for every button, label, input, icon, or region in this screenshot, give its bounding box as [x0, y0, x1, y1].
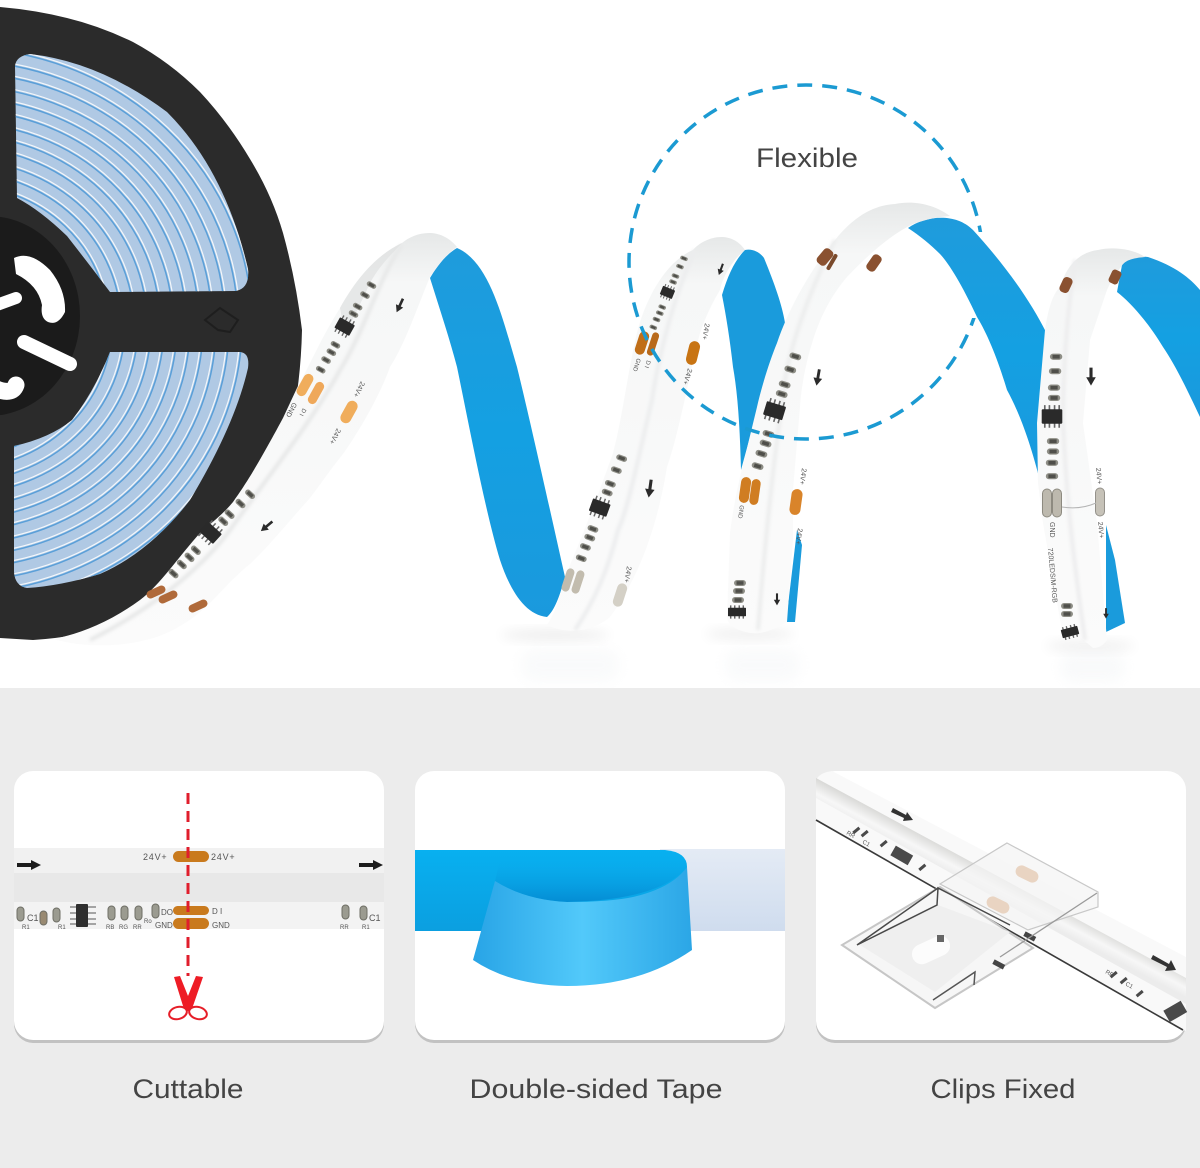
strip: C1 [1124, 982, 1134, 991]
strip silk-screen labels: 24V+ [351, 380, 365, 398]
label: double-sided tape: Double-sided Tape [470, 1074, 722, 1104]
light strip [660, 849, 785, 931]
hub left slot [0, 298, 16, 306]
strip: RR [845, 831, 856, 840]
strip: C1 [861, 840, 871, 849]
strip silk-screen labels: 24V+ [681, 367, 693, 385]
hub slots [14, 256, 65, 323]
reel outer disc [0, 7, 302, 640]
strip photo with circuit detail: RG [119, 925, 128, 931]
hub bar slot [24, 342, 70, 364]
strip photo with circuit detail: C1 [27, 913, 39, 923]
blue tape section 4 [1117, 257, 1200, 417]
strip silk-screen labels: 720LEDS/M-RGB [1046, 548, 1058, 604]
strip photo with circuit detail: Ro [144, 919, 152, 925]
red cut line [186, 793, 190, 976]
flexible callout circle [629, 85, 983, 439]
strip silk-screen labels: D I [643, 359, 651, 369]
strip silk-screen labels: 24V+ [622, 566, 632, 583]
strip photo with circuit detail: 24V+ [211, 852, 235, 862]
strip [816, 771, 1187, 1031]
strip photo with circuit detail: RB [106, 925, 114, 931]
blue tape section 1 [430, 248, 565, 617]
floor shadows and reflections under the strip [500, 629, 1135, 682]
strip photo with circuit detail: RR [340, 925, 349, 931]
strip section 4 [1037, 248, 1145, 648]
strip photo with circuit detail: RR [133, 925, 142, 931]
strip photo with circuit detail: R1 [22, 925, 30, 931]
reel recycling mark [205, 308, 238, 332]
strip leading out of the reel [53, 233, 457, 645]
blue tape section 2 [722, 250, 785, 470]
strip silk-screen labels: GND [284, 401, 297, 418]
strip silk-screen labels: GND [1048, 522, 1055, 538]
panel: double-sided tape [415, 771, 785, 1043]
strip silk-screen labels: 24V+ [1096, 522, 1104, 539]
strip photo with circuit detail: GND [155, 921, 173, 930]
strip photo with circuit detail: R1 [362, 925, 370, 931]
label: clips fixed: Clips Fixed [930, 1074, 1076, 1104]
strip silk-screen labels [284, 323, 1104, 604]
strip section 3 [727, 203, 950, 633]
strip silk-screen labels: 24V+ [794, 528, 803, 545]
strip section 2 [547, 237, 745, 631]
strip photo with circuit detail: DO [161, 908, 173, 917]
bottom panel background [0, 688, 1200, 1168]
tape loop front [473, 867, 692, 986]
label: cuttable: Cuttable [132, 1074, 244, 1104]
PCB components on the strip [165, 253, 1080, 641]
strip silk-screen labels: GND [631, 357, 641, 373]
strip: RR [1104, 970, 1115, 979]
blue sliver behind section 4 [1106, 525, 1125, 632]
solder pads [145, 247, 1122, 614]
blue tape section 3 [908, 218, 1046, 485]
clear clip base [842, 887, 1036, 1008]
strip silk-screen labels: 24V+ [700, 323, 710, 340]
arrow right [359, 860, 383, 870]
tape loop inner [495, 860, 687, 902]
reel bottom tape window [14, 352, 248, 588]
strip silk-screen labels: D I [297, 407, 307, 417]
strip photo with circuit detail: C1 [369, 913, 381, 923]
strip photo with circuit detail: R1 [58, 925, 66, 931]
clear clip top [940, 843, 1098, 957]
panel: clips fixed [816, 771, 1187, 1043]
direction arrows on the strip [258, 263, 1109, 619]
strip photo with circuit detail: GND [212, 921, 230, 930]
strip silk-screen labels: 24V+ [1094, 468, 1102, 485]
blue sliver behind section 3 [786, 530, 802, 622]
strip silk-screen labels: GND [736, 505, 744, 519]
reel [0, 7, 302, 640]
strip photo with circuit detail: D I [212, 907, 222, 916]
strip photo with circuit detail: 24V+ [143, 852, 167, 862]
reel hub [0, 216, 80, 416]
strip silk-screen labels: 24V+ [798, 468, 807, 485]
strip silk-screen labels: 24V+ [327, 427, 341, 445]
top photo background [0, 0, 1200, 688]
reel top tape window [15, 54, 248, 292]
strip photo with circuit detail [14, 848, 384, 931]
hub lower slot [0, 385, 16, 391]
arrow left [17, 860, 41, 870]
flexible label: Flexible [756, 143, 858, 173]
panel: cuttable [14, 771, 384, 1043]
peeled tape backing [415, 850, 687, 931]
icon: scissors [168, 976, 208, 1021]
